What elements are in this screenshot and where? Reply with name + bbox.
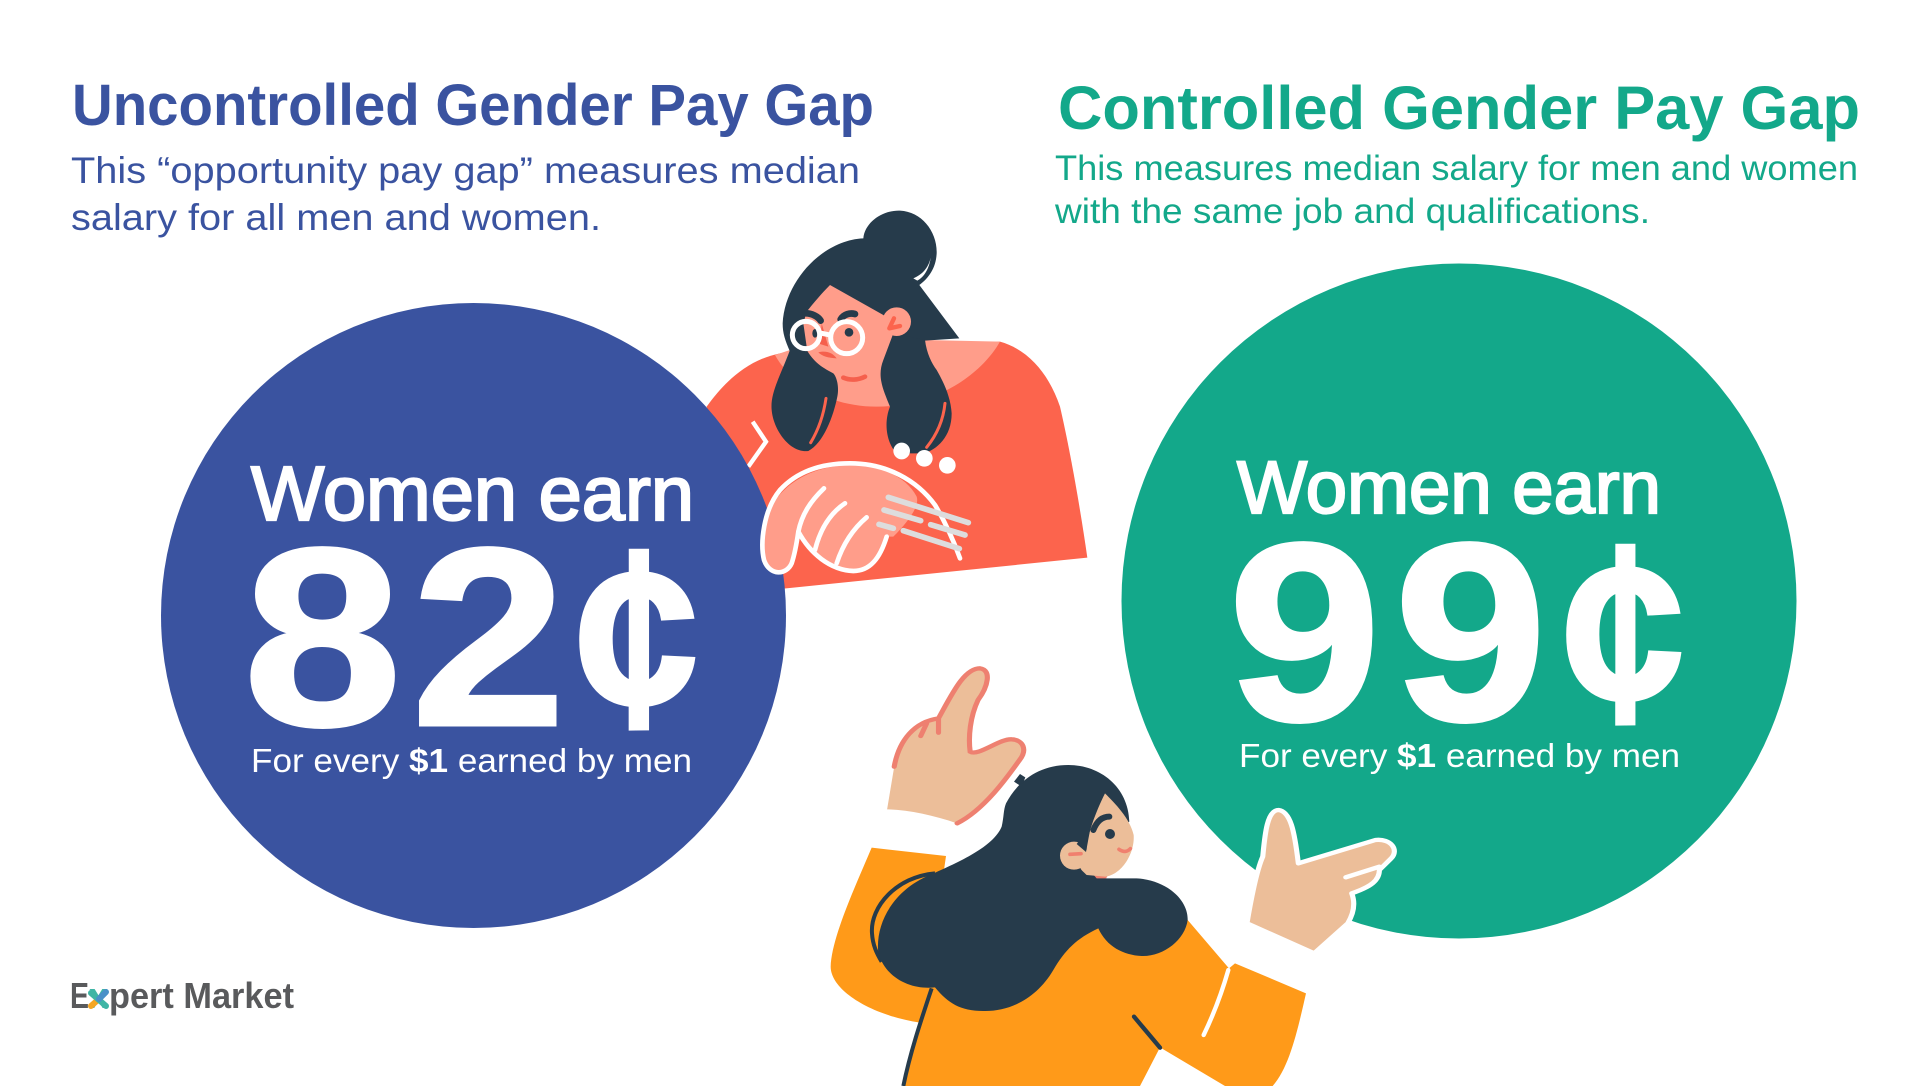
cheek [1119,849,1130,851]
hair over ear [1077,827,1091,852]
text block: controlled description: This measures median salary for men and women [1055,149,1858,188]
number: 82 cents [243,495,699,779]
number: 82 cents: 8 [243,495,402,779]
palm and thumb [763,465,917,572]
white sleeve seam [1204,970,1228,1035]
decorative dots [893,443,956,474]
text block: controlled description [1054,149,1858,231]
dark pocket seam [1134,1017,1160,1048]
hair outline arc [872,873,935,962]
finger lines [798,488,867,563]
nose and mouth [818,323,837,358]
eyebrows [806,313,855,321]
label: women earn: Women earn [251,451,694,537]
bun highlight [913,258,931,281]
pen strokes [879,497,968,549]
raised hand outline [894,668,1024,823]
left eye [812,329,818,338]
text block: uncontrolled description: salary for all men and women. [71,197,601,238]
inner ear [889,318,900,328]
green disc [1122,264,1796,938]
glasses [792,321,863,354]
ear [882,307,911,336]
caption: for every dollar: For every $1 earned by men [1239,737,1680,774]
logo x mark [91,992,106,1006]
logo: Expert Market [70,975,294,1016]
orange sweater [831,848,1306,1086]
neck shadow [843,377,865,380]
text block: controlled description: with the same job and qualifications. [1054,192,1650,231]
hand outline [762,463,960,572]
text block: uncontrolled description [71,150,860,238]
label: women earn: Women earn [1237,446,1661,529]
illustration: hand over blue circle [762,463,968,572]
heading: controlled gender pay gap: Controlled Gender Pay Gap [1058,74,1860,142]
illustration: woman from behind pointing [831,765,1306,1086]
blue disc [161,303,786,928]
collar chevron [748,422,766,467]
text block: uncontrolled description: This “opportunity pay gap” measures median [71,150,860,191]
neck and chest [775,337,1000,407]
number: 99 cents: 9 [1228,490,1381,774]
hair back and bun [783,211,959,352]
number: 99 cents: ¢ [1562,490,1685,774]
hair [878,765,1188,1011]
neck [1094,875,1108,878]
right eye [845,328,853,337]
face [1080,793,1134,877]
caption: for every dollar: For every $1 earned by men [251,742,692,779]
number: 99 cents [1228,490,1685,774]
number: 82 cents: 2 [411,495,566,779]
ear [1060,842,1088,870]
number: 99 cents: 9 [1394,490,1547,774]
logo letter x: x [89,975,108,1016]
illustration: both hands [887,668,1394,953]
logo letter E: E [70,975,89,1016]
face and neck [803,285,893,403]
hair tuft [1014,774,1025,787]
panel: blue circle, 82 cents [161,303,786,928]
left hair lock [771,347,838,451]
shirt [707,342,1087,589]
eye [1105,829,1115,839]
panel: green circle, 99 cents [1122,264,1796,938]
ear shade [1070,848,1081,860]
number: 82 cents: ¢ [575,495,699,779]
finger gap [1346,867,1379,877]
hair streaks [811,398,945,447]
pointing hand [1247,810,1394,953]
dark back seam [903,988,932,1086]
illustration: woman with glasses, upper body [707,211,1087,589]
raised hand [887,668,1024,823]
heading: uncontrolled gender pay gap: Uncontrolled Gender Pay Gap [72,73,874,138]
right hair lock [881,333,952,453]
eyebrow [1093,817,1109,830]
logo wordmark remainder: pert Market [109,975,294,1016]
